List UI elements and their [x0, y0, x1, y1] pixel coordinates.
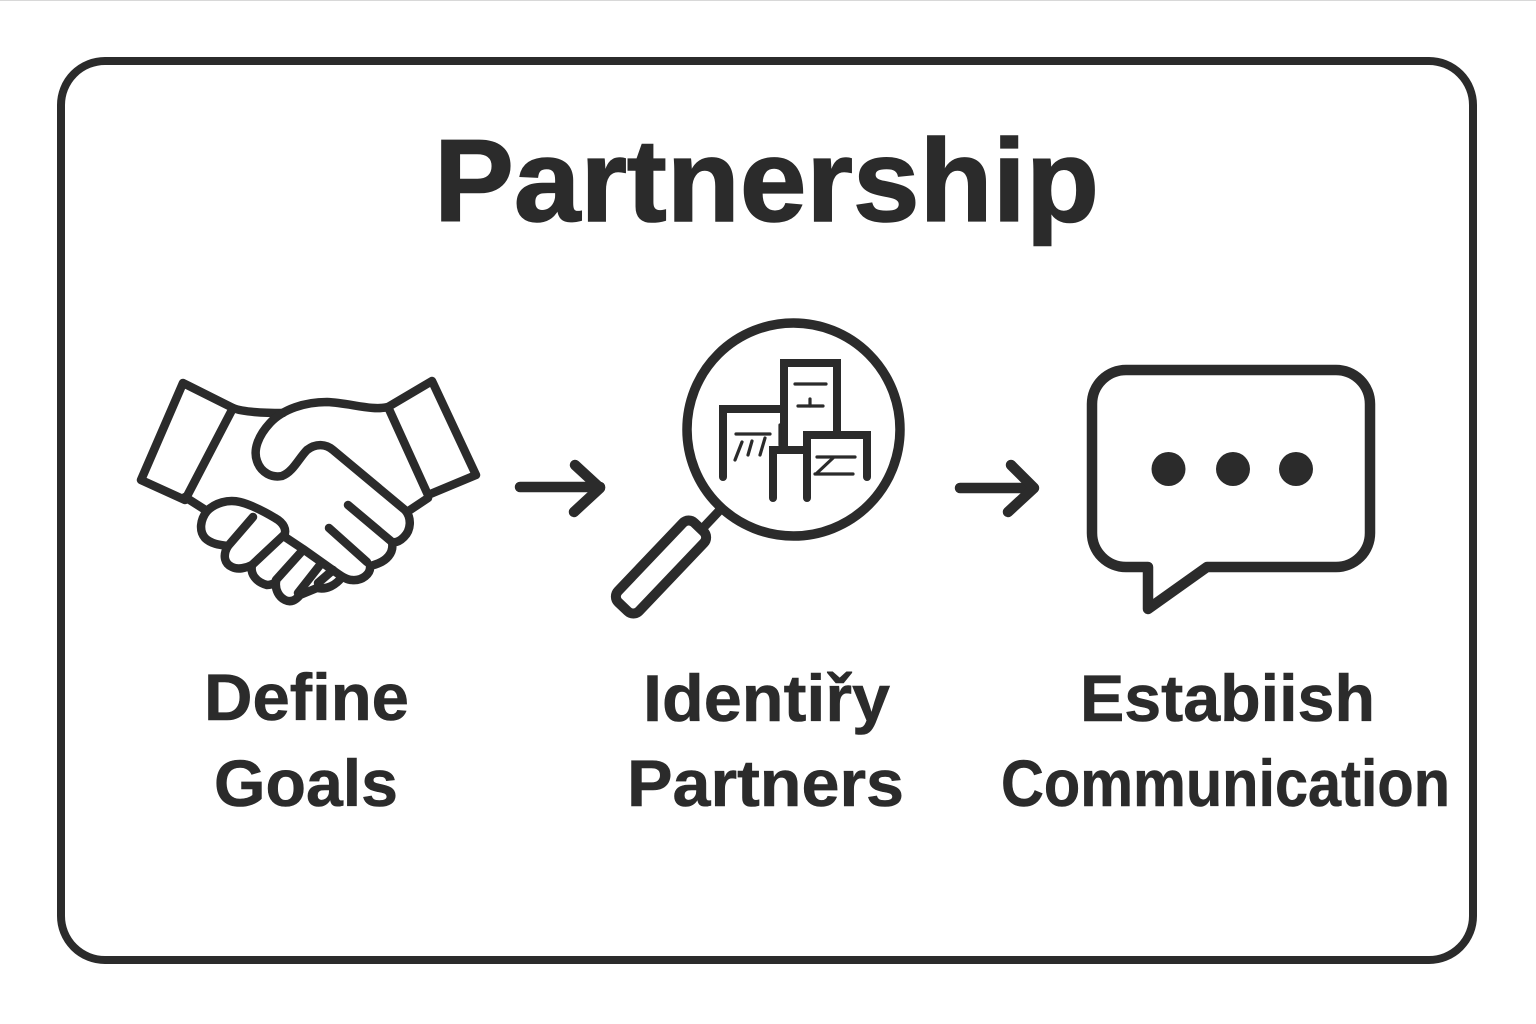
label: Identify Partners: Identiřy: [643, 661, 890, 735]
arrow: goals to partners: [520, 465, 600, 512]
label: Establish Communication: Estabiish: [1080, 661, 1375, 735]
icon: handshake: [141, 381, 476, 601]
label: Define Goals: [204, 660, 409, 820]
label: Establish Communication: Communication: [1001, 746, 1450, 820]
arrow: partners to communication: [960, 465, 1034, 512]
building window marks: [735, 384, 855, 474]
label: Identify Partners: [627, 661, 904, 820]
buildings: [723, 363, 867, 498]
lens: [687, 323, 900, 536]
label: Establish Communication: [1001, 661, 1450, 820]
label: Define Goals: Define: [204, 660, 409, 734]
label: Define Goals: Goals: [214, 746, 398, 820]
title: Partnership: [434, 115, 1099, 246]
finger outlines: [201, 511, 342, 601]
handle: [613, 511, 719, 617]
icon: magnifying glass over buildings: [613, 323, 900, 617]
label: Identify Partners: Partners: [627, 746, 904, 820]
icon: speech bubble: [1092, 370, 1370, 609]
